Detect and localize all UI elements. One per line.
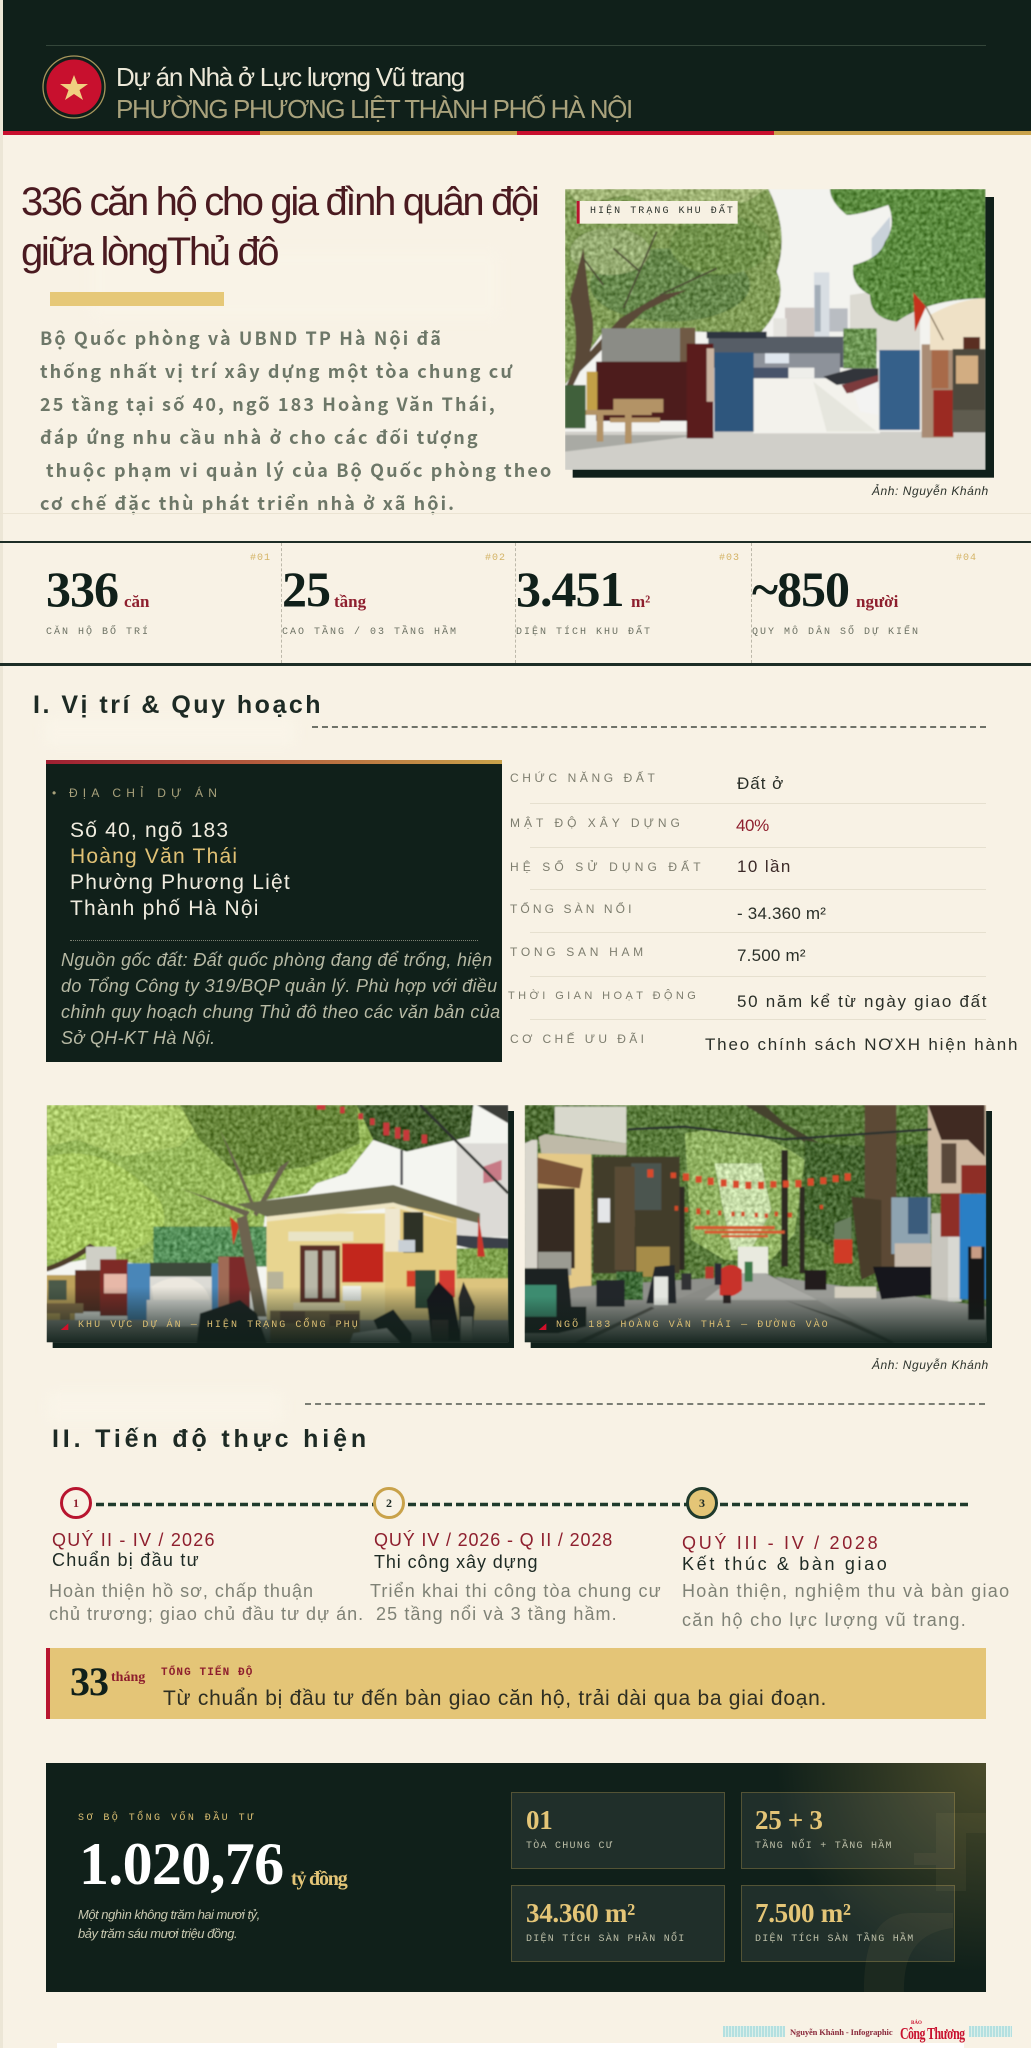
fact box: above-ground floor area: 34.360 m² <box>526 1898 635 1928</box>
fact box: basement floor area: 7.500 m² <box>755 1898 851 1928</box>
footer credit: Công Thương <box>900 2024 965 2043</box>
planning indicators table: HỆ SỐ SỬ DỤNG ĐẤT <box>510 860 705 874</box>
step 3 text: Kết thúc & bàn giao <box>682 1554 889 1574</box>
address lines: Thành phố Hà Nội <box>70 897 260 920</box>
stat 4: ~850 <box>752 561 849 617</box>
step 2 text: Thi công xây dựng <box>374 1552 538 1572</box>
header band <box>3 0 1031 135</box>
address lines: Phường Phương Liệt <box>70 871 291 894</box>
fact box: basement floor area: DIỆN TÍCH SÀN TẦNG HẦM <box>755 1934 915 1945</box>
land origin note: do Tổng Công ty 319/BQP quản lý. Phù hợp với điều <box>61 976 498 996</box>
step 3 marker <box>686 1487 718 1519</box>
land origin note: Sở QH-KT Hà Nội. <box>61 1028 216 1048</box>
33 months: 33 <box>70 1659 108 1704</box>
step 2 text: 25 tầng nổi và 3 tầng hầm. <box>376 1604 618 1624</box>
main headline: giữa lòngThủ đô <box>21 230 277 274</box>
planning indicators table: - 34.360 m² <box>737 904 826 923</box>
footer credit <box>723 2026 1012 2037</box>
stat 1 <box>46 553 271 638</box>
step 1 text: QUÝ II - IV / 2026 <box>52 1530 216 1550</box>
stat 4: #04 <box>956 553 977 564</box>
planning indicators table <box>508 771 1019 1054</box>
total investment figure: 1.020,76 <box>79 1831 283 1897</box>
main headline <box>21 180 538 274</box>
investment unit: tỷ đồng <box>291 1868 347 1890</box>
header subtitle: PHƯỜNG PHƯƠNG LIỆT THÀNH PHỐ HÀ NỘI <box>116 94 632 124</box>
amount in words: Một nghìn không trăm hai mươi tỷ, <box>78 1907 260 1922</box>
stats strip <box>0 541 1031 666</box>
photo: project area, side gate <box>46 1105 514 1348</box>
fact box: floors <box>741 1792 955 1869</box>
fact box: above-ground floor area: DIỆN TÍCH SÀN PHẦN NỔI <box>526 1934 686 1945</box>
fact box: floors: 25 + 3 <box>755 1805 823 1835</box>
step 2 text: QUÝ IV / 2026 - Q II / 2028 <box>374 1530 613 1550</box>
planning indicators table: THỜI GIAN HOẠT ĐỘNG <box>508 990 699 1002</box>
step 1 marker <box>60 1487 92 1519</box>
panel: project address <box>46 760 502 1062</box>
main headline: 336 căn hộ cho gia đình quân đội <box>21 180 537 224</box>
planning indicators table: Theo chính sách NƠXH hiện hành <box>705 1035 1019 1054</box>
photo: alley entrance <box>524 1105 992 1348</box>
stat 1: 336 <box>46 561 118 617</box>
photo: current state of the site <box>565 189 994 478</box>
photo caption: KHU VỰC DỰ ÁN — HIỆN TRẠNG CỔNG PHỤ <box>78 1320 360 1331</box>
land origin note <box>61 950 500 1048</box>
planning indicators table: Đất ở <box>737 774 784 793</box>
stat 1: CĂN HỘ BỐ TRÍ <box>46 627 150 638</box>
stat 2: 25 <box>282 561 330 617</box>
header title: Dự án Nhà ở Lực lượng Vũ trang <box>116 62 464 92</box>
step 1 text: Chuẩn bị đầu tư <box>52 1550 200 1570</box>
investment label: SƠ BỘ TỔNG VỐN ĐẦU TƯ <box>78 1813 255 1824</box>
fact box: floors: TẦNG NỔI + TẦNG HẦM <box>755 1841 893 1852</box>
intro paragraph: cơ chế đặc thù phát triển nhà ở xã hội. <box>40 490 456 516</box>
timeline <box>60 1487 968 1519</box>
footer credit: Nguyễn Khánh - Infographic <box>790 2027 892 2037</box>
stat 2: CAO TẦNG / 03 TẦNG HẦM <box>282 627 458 638</box>
photo credit: Ảnh: Nguyễn Khánh <box>872 1358 989 1372</box>
step 1 text <box>49 1530 364 1624</box>
step 1 text: chủ trương; giao chủ đầu tư dự án. <box>49 1604 364 1624</box>
stat 3: #03 <box>719 553 740 564</box>
fact box: basement floor area <box>741 1885 955 1962</box>
intro paragraph: thống nhất vị trí xây dựng một tòa chung cư <box>40 358 514 384</box>
planning indicators table: CƠ CHẾ ƯU ĐÃI <box>510 1032 647 1046</box>
planning indicators table: MẬT ĐỘ XÂY DỰNG <box>510 816 684 830</box>
planning indicators table: TỔNG SÀN NỔI <box>510 902 635 916</box>
address lines: Số 40, ngõ 183 <box>70 819 229 842</box>
stat 4: QUY MÔ DÂN SỐ DỰ KIẾN <box>752 627 920 638</box>
stat 2: #02 <box>485 553 506 564</box>
photo credit: Ảnh: Nguyễn Khánh <box>872 484 989 498</box>
intro paragraph <box>40 325 553 516</box>
stat 2 <box>281 543 516 663</box>
photo caption: NGÕ 183 HOÀNG VĂN THÁI — ĐƯỜNG VÀO <box>556 1320 830 1331</box>
fact box: tower <box>511 1792 725 1869</box>
planning indicators table: 7.500 m² <box>737 946 806 965</box>
planning indicators table: 40% <box>736 816 769 835</box>
section heading II: II. Tiến độ thực hiện <box>52 1425 370 1453</box>
step 2 text: Triển khai thi công tòa chung cư <box>370 1581 662 1601</box>
total schedule callout <box>46 1648 986 1719</box>
photo label: HIỆN TRẠNG KHU ĐẤT <box>590 206 735 217</box>
panel label: • ĐỊA CHỈ DỰ ÁN <box>52 786 222 800</box>
stat 3 <box>515 543 752 663</box>
gold highlight bar <box>50 292 224 306</box>
intro paragraph: thuộc phạm vi quản lý của Bộ Quốc phòng theo <box>46 457 553 483</box>
fact box: tower: 01 <box>526 1805 552 1835</box>
callout text: Từ chuẩn bị đầu tư đến bàn giao căn hộ, trải dài qua ba giai đoạn. <box>163 1687 827 1710</box>
step 2 marker: 2 <box>386 1496 392 1510</box>
land origin note: Nguồn gốc đất: Đất quốc phòng đang để trống, hiện <box>61 950 492 970</box>
step 3 text: Hoàn thiện, nghiệm thu và bàn giao <box>682 1581 1010 1601</box>
stat 3: m² <box>631 592 650 611</box>
stat 4: người <box>856 592 898 611</box>
step 3 text: căn hộ cho lực lượng vũ trang. <box>682 1610 967 1630</box>
fact box: tower: TÒA CHUNG CƯ <box>526 1841 613 1852</box>
step 2 marker <box>373 1487 405 1519</box>
total schedule callout: tháng <box>111 1670 145 1685</box>
planning indicators table: CHỨC NĂNG ĐẤT <box>510 771 658 785</box>
step 1 text: Hoàn thiện hồ sơ, chấp thuận <box>49 1581 314 1601</box>
callout label: TỔNG TIẾN ĐỘ <box>161 1667 253 1679</box>
step 3 text <box>682 1533 1010 1630</box>
stat 3: 3.451 <box>516 561 624 617</box>
amount in words: bảy trăm sáu mươi triệu đồng. <box>78 1926 237 1940</box>
header colour stripe <box>3 131 1031 135</box>
stat 2: tầng <box>334 592 366 611</box>
emblem: red circle with gold star <box>42 55 106 119</box>
section heading I: I. Vị trí & Quy hoạch <box>33 691 323 719</box>
step 1 marker: 1 <box>73 1496 79 1510</box>
stat 1: căn <box>124 592 150 611</box>
stat 1: #01 <box>250 553 271 564</box>
investment panel <box>46 1763 986 1992</box>
address lines: Hoàng Văn Thái <box>70 845 238 868</box>
planning indicators table: TONG SAN HAM <box>510 945 647 959</box>
fact box: above-ground floor area <box>511 1885 725 1962</box>
text: BÁO <box>911 2021 922 2026</box>
stat 3: DIỆN TÍCH KHU ĐẤT <box>516 627 652 638</box>
planning indicators table: 50 năm kể từ ngày giao đất <box>737 992 988 1011</box>
intro paragraph: đáp ứng nhu cầu nhà ở cho các đối tượng <box>40 424 480 450</box>
intro paragraph: 25 tầng tại số 40, ngõ 183 Hoàng Văn Thái, <box>40 391 497 417</box>
land origin note: chỉnh quy hoạch chung Thủ đô theo các văn bản của <box>61 1002 500 1022</box>
step 2 text <box>370 1530 662 1624</box>
step 3 marker: 3 <box>699 1496 705 1510</box>
stat 4 <box>751 543 1031 663</box>
address lines <box>70 819 291 920</box>
planning indicators table: 10 lần <box>737 857 792 876</box>
step 3 text: QUÝ III - IV / 2028 <box>682 1533 880 1553</box>
intro paragraph: Bộ Quốc phòng và UBND TP Hà Nội đã <box>40 325 443 351</box>
amount in words <box>78 1907 260 1940</box>
